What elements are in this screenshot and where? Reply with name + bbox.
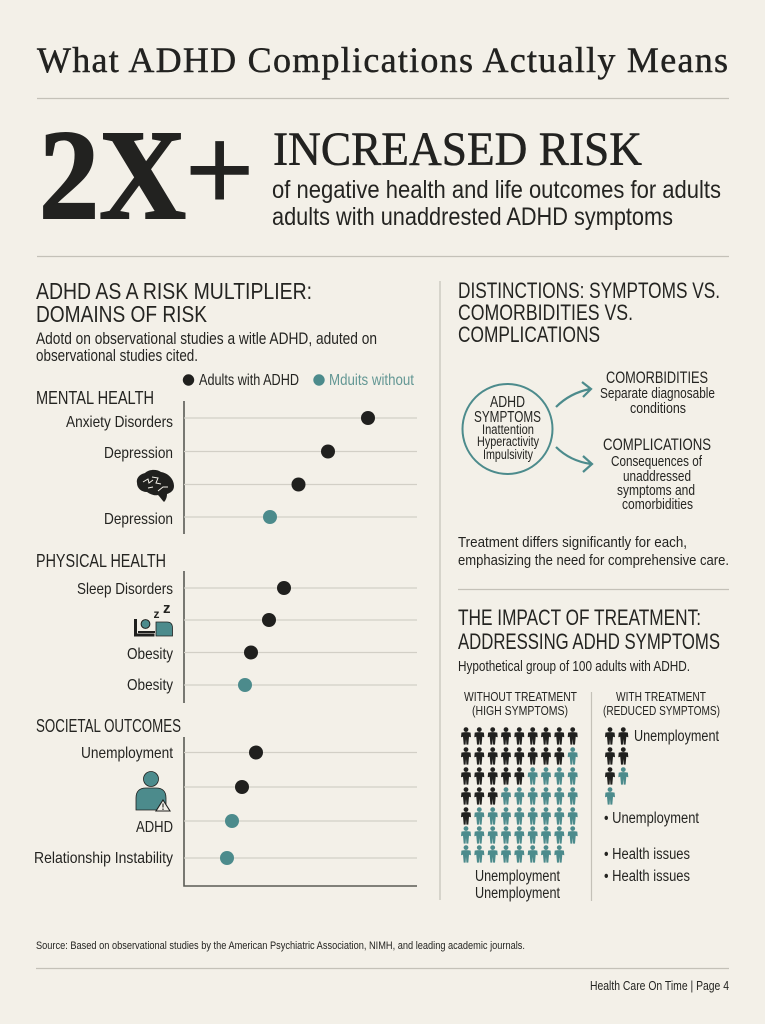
- hero heading: INCREASED RISK: [273, 123, 642, 176]
- hero statistic: +: [184, 102, 255, 240]
- pictogram: with treatment: [605, 727, 628, 805]
- chart: physical health: PHYSICAL HEALTH: [36, 551, 166, 571]
- outcome list: • Health issues: [604, 846, 690, 863]
- complications text: unaddressed: [623, 469, 691, 485]
- pictogram caption: without treatment: [475, 868, 561, 902]
- panel: impact of treatment: [458, 605, 720, 902]
- label: unemployment: Unemployment: [634, 728, 720, 745]
- chart: physical health: Obesity: [127, 677, 173, 694]
- chart: physical health: [36, 551, 417, 703]
- complications text: Consequences of: [611, 454, 703, 470]
- chart: physical health: Obesity: [127, 646, 173, 663]
- pictogram caption: without treatment: Unemployment: [475, 868, 561, 885]
- footer: Health Care On Time | Page 4: [590, 979, 729, 993]
- column heading: with treatment: WITH TREATMENT: [616, 689, 706, 704]
- icon: person with warning: [136, 772, 170, 811]
- subheading: observational studies cited.: [36, 347, 198, 365]
- chart: societal outcomes: ADHD: [136, 819, 173, 836]
- pictogram: without treatment: [461, 727, 578, 863]
- icon: sleeping in bed: z: [154, 607, 160, 621]
- column heading: with treatment: [603, 689, 720, 718]
- icon: sleeping in bed: [136, 600, 172, 636]
- heading: domains of risk: [36, 278, 312, 327]
- source note: Source: Based on observational studies by the American Psychiatric Association, NIMH, and leading academic journals.: [36, 940, 525, 952]
- subheading: hypothetical group: Hypothetical group of 100 adults with ADHD.: [458, 658, 690, 675]
- legend: Adults with ADHD: [199, 372, 299, 389]
- panel: domains of risk: [34, 278, 417, 886]
- legend: Mduits without: [329, 372, 415, 389]
- chart: mental health: [36, 388, 417, 534]
- diagram: adhd symptoms circle: ADHD: [490, 394, 525, 411]
- diagram: adhd symptoms circle: Inattention: [482, 422, 534, 437]
- complications text: [603, 436, 711, 513]
- hero description: adults with unaddrested ADHD symptoms: [272, 203, 673, 231]
- treatment note: emphasizing the need for comprehensive care.: [458, 552, 729, 569]
- diagram: adhd symptoms circle: SYMPTOMS: [474, 409, 541, 426]
- chart: societal outcomes: Unemployment: [81, 745, 173, 762]
- treatment note: [458, 534, 729, 569]
- icon: sleeping in bed: z: [163, 600, 170, 617]
- column heading: with treatment: (REDUCED SYMPTOMS): [603, 703, 720, 718]
- heading: domains of risk: DOMAINS OF RISK: [36, 301, 208, 327]
- chart: mental health: Anxiety Disorders: [66, 414, 173, 431]
- diagram: adhd symptoms circle: Hyperactivity: [477, 434, 539, 449]
- complications text: COMPLICATIONS: [603, 436, 711, 454]
- diagram: adhd symptoms circle: Impulsivity: [483, 447, 533, 462]
- hero description: [272, 176, 721, 231]
- column heading: without treatment: [464, 689, 577, 718]
- chart: physical health: Sleep Disorders: [77, 581, 173, 598]
- diagram: adhd symptoms circle: [462, 384, 552, 474]
- outcome list: • Health issues: [604, 868, 690, 885]
- legend: [183, 372, 415, 389]
- chart: societal outcomes: [34, 716, 417, 886]
- column heading: without treatment: WITHOUT TREATMENT: [464, 689, 577, 704]
- hero statistic: 2X: [39, 104, 186, 246]
- chart: mental health: Depression: [104, 445, 173, 462]
- chart: mental health: MENTAL HEALTH: [36, 388, 154, 408]
- heading: impact of treatment: [458, 605, 720, 654]
- outcome list: [604, 810, 700, 885]
- chart: societal outcomes: SOCIETAL OUTCOMES: [36, 716, 181, 736]
- outcome list: • Unemployment: [604, 810, 700, 827]
- column heading: without treatment: (HIGH SYMPTOMS): [472, 703, 568, 718]
- complications text: comorbidities: [622, 497, 693, 513]
- heading: impact of treatment: THE IMPACT OF TREATMENT:: [458, 605, 701, 630]
- arrow: to complications: [556, 447, 592, 472]
- heading: distinctions: COMORBIDITIES VS.: [458, 300, 633, 325]
- chart: societal outcomes: Relationship Instability: [34, 850, 173, 867]
- arrow: to comorbidities: [556, 382, 591, 407]
- treatment note: Treatment differs significantly for each,: [458, 534, 687, 551]
- comorbidities text: COMORBIDITIES: [606, 369, 708, 387]
- comorbidities text: conditions: [630, 401, 686, 417]
- heading: distinctions: COMPLICATIONS: [458, 322, 600, 347]
- heading: domains of risk: ADHD AS A RISK MULTIPLIER:: [36, 278, 312, 304]
- title: What ADHD Complications Actually Means: [37, 40, 728, 80]
- pictogram caption: without treatment: Unemployment: [475, 885, 561, 902]
- heading: distinctions: [458, 278, 720, 347]
- chart: mental health: Depression: [104, 511, 173, 528]
- comorbidities text: [600, 369, 715, 417]
- comorbidities text: Separate diagnosable: [600, 386, 715, 402]
- subheading: [36, 330, 377, 365]
- panel: distinctions: [458, 278, 729, 569]
- subheading: Adotd on observational studies a witle ADHD, aduted on: [36, 330, 377, 348]
- complications text: symptoms and: [617, 483, 695, 499]
- icon: brain: [137, 470, 174, 502]
